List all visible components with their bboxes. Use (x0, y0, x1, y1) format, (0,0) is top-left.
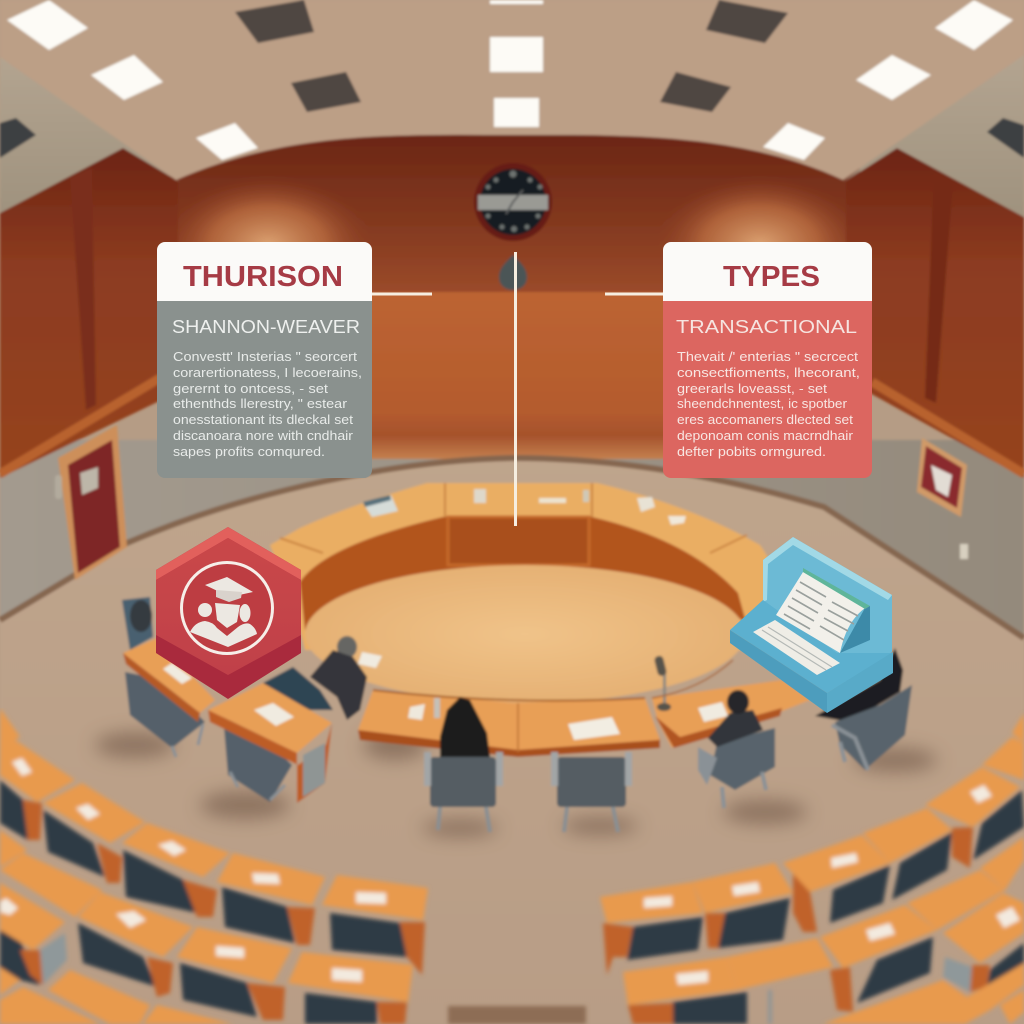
grey wall (0, 440, 1024, 638)
front chairs and person (424, 697, 632, 832)
front chair left (424, 752, 503, 832)
left panel body (157, 300, 372, 478)
left connector line (371, 292, 432, 296)
central vertical connector (514, 252, 517, 526)
right panel header (663, 242, 872, 301)
right row three (823, 963, 1024, 1024)
right body text: deponoam conis macrndhair (677, 429, 853, 443)
panel: Thurison (157, 242, 372, 478)
right chair two (835, 685, 912, 770)
wall clock (474, 163, 552, 241)
front chair right (551, 752, 632, 832)
left body text: ethenthds llerestry, " estear (173, 397, 347, 411)
right chairs and people (698, 648, 912, 808)
front desk (358, 690, 660, 757)
central table ring (270, 483, 776, 703)
right body text: sheendchnentest, ic spotber (677, 397, 847, 411)
ceiling lights (7, 0, 1013, 160)
right person one (708, 710, 763, 747)
right body text: consectfioments, lhecorant, (677, 366, 860, 380)
floor step (448, 1006, 586, 1024)
wall spotlights (163, 175, 865, 315)
right subheading: TRANSACTIONAL (676, 317, 857, 337)
table papers (363, 495, 398, 517)
floor (0, 440, 1024, 1024)
bottom seating rows (0, 708, 1024, 1024)
left body text: onesstationant its dleckal set (173, 413, 354, 427)
right panel seam (925, 172, 953, 403)
ceiling (0, 0, 1024, 180)
left body text: corarertionatess, I lecoerains, (173, 366, 362, 380)
wall plaque (917, 438, 967, 517)
right body text: Thevait /' enterias " secrcect (677, 350, 859, 364)
right body text: greerarls loveasst, - set (677, 382, 828, 396)
left heading: THURISON (183, 261, 343, 293)
left side desks (123, 638, 332, 803)
left body text: sapes profits comqured. (173, 445, 325, 459)
right body text (677, 350, 860, 459)
left body text: discanoara nore with cndhair (173, 429, 353, 443)
icon: blue document box (730, 537, 893, 713)
right row two (623, 837, 1024, 1024)
right body text: eres accomaners dlected set (677, 413, 854, 427)
right body text: defter pobits ormgured. (677, 445, 826, 459)
left row one (0, 708, 428, 975)
left red panels (0, 148, 178, 478)
arena floor (305, 565, 745, 703)
upper wood wall (170, 130, 860, 300)
ceiling side wedges (0, 40, 180, 213)
shadows on floor (95, 730, 937, 837)
icon: graduates hexagon (156, 527, 301, 699)
left body text: Convestt' Insterias " seorcert (173, 350, 358, 364)
left panel header (157, 242, 372, 301)
left chairs (122, 597, 333, 802)
right panel body (663, 300, 872, 478)
left row two (0, 830, 413, 1024)
right red panels (846, 148, 1024, 478)
right seating rows (448, 713, 1024, 1024)
left panel seam (70, 168, 96, 410)
ceiling vents (0, 0, 1024, 158)
left body text: gerernt to ontcess, - set (173, 382, 329, 396)
wall socket (960, 544, 968, 559)
right heading: TYPES (723, 261, 820, 293)
right hidden person (815, 648, 903, 722)
lower wood wall (165, 292, 865, 459)
left subheading: SHANNON-WEAVER (172, 317, 360, 337)
right row one (600, 713, 1024, 975)
wood trim (0, 378, 1024, 474)
wall speaker (499, 255, 527, 290)
panel: Types (663, 242, 872, 478)
floor edge trim (0, 458, 1024, 638)
door (55, 425, 127, 580)
left body text (173, 350, 362, 459)
document pages (776, 572, 865, 653)
front seated person (440, 697, 490, 757)
left seating rows (0, 708, 428, 1024)
right chair one (710, 728, 775, 790)
seated person left (310, 636, 382, 720)
icon: people silhouettes (190, 577, 257, 647)
right desk (652, 655, 810, 748)
left row three (0, 967, 233, 1024)
right connector line (605, 292, 664, 296)
